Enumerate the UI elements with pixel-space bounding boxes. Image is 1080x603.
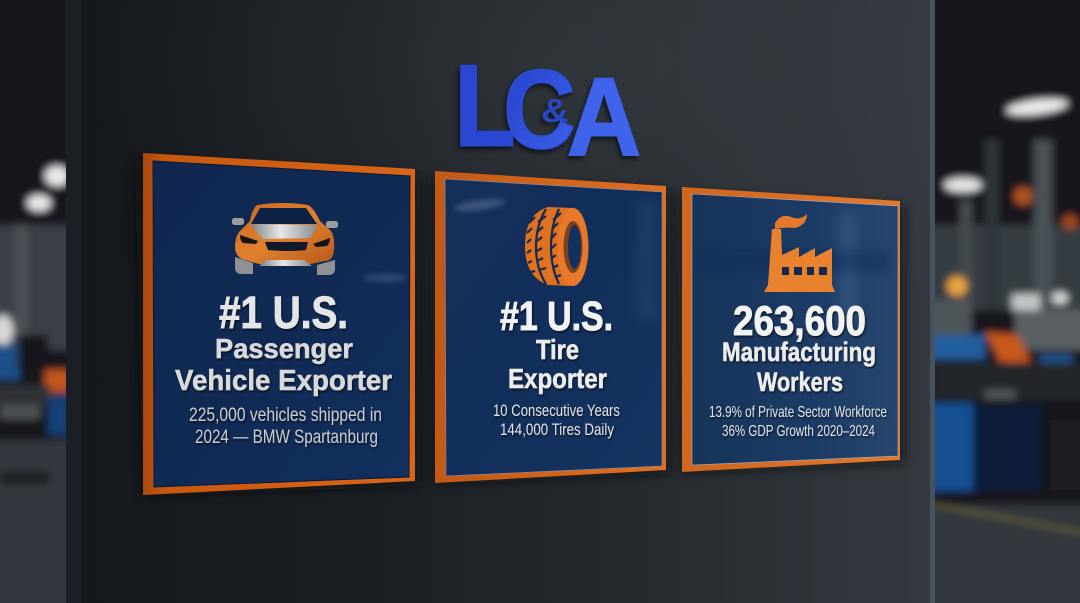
panel 2 details: 144,000 Tires Daily xyxy=(500,420,614,439)
panel 2 heading: #1 U.S. xyxy=(500,293,613,339)
logo: LC&A: & xyxy=(541,92,569,129)
panel 3 heading: 263,600 xyxy=(733,297,866,344)
panel 3 details: 36% GDP Growth 2020–2024 xyxy=(722,423,875,440)
icon: factory xyxy=(764,214,835,292)
panel 2 title: Exporter xyxy=(508,363,607,394)
panel 1 title: Passenger xyxy=(215,333,353,364)
panel 3 title xyxy=(722,337,876,397)
logo: LC&A xyxy=(455,43,641,179)
panel 2 title xyxy=(508,334,607,394)
panel 2 details: 10 Consecutive Years xyxy=(493,401,620,420)
panel 3 title: Workers xyxy=(757,367,843,397)
panel 1 frame xyxy=(135,153,420,496)
panel: tire exporter xyxy=(428,171,670,484)
panel 1 heading: #1 U.S. xyxy=(219,287,348,338)
panel 2 frame xyxy=(428,171,670,484)
panel 2 details xyxy=(493,401,620,439)
logo: LC&A: L xyxy=(455,43,515,170)
panel 1 details: 2024 — BMW Spartanburg xyxy=(195,427,378,448)
panel 3 details xyxy=(709,404,887,440)
logo: LC&A: A xyxy=(567,56,641,179)
icon: car xyxy=(232,203,338,275)
panel 2 title: Tire xyxy=(536,334,579,365)
icon: tire xyxy=(525,207,588,286)
panel: passenger vehicle exporter xyxy=(135,153,420,496)
panel: manufacturing workers xyxy=(676,187,905,473)
panel 1 title xyxy=(175,333,392,397)
logo: LC&A: C xyxy=(503,47,576,172)
panel 3 details: 13.9% of Private Sector Workforce xyxy=(709,404,887,421)
panel 3 title: Manufacturing xyxy=(722,337,876,367)
panel 1 details xyxy=(189,405,382,448)
panel 1 title: Vehicle Exporter xyxy=(175,365,392,397)
background: blurred factory left xyxy=(0,158,66,603)
panel 1 details: 225,000 vehicles shipped in xyxy=(189,405,382,426)
background: blurred factory right xyxy=(935,90,1080,603)
panel 3 frame xyxy=(676,187,905,473)
